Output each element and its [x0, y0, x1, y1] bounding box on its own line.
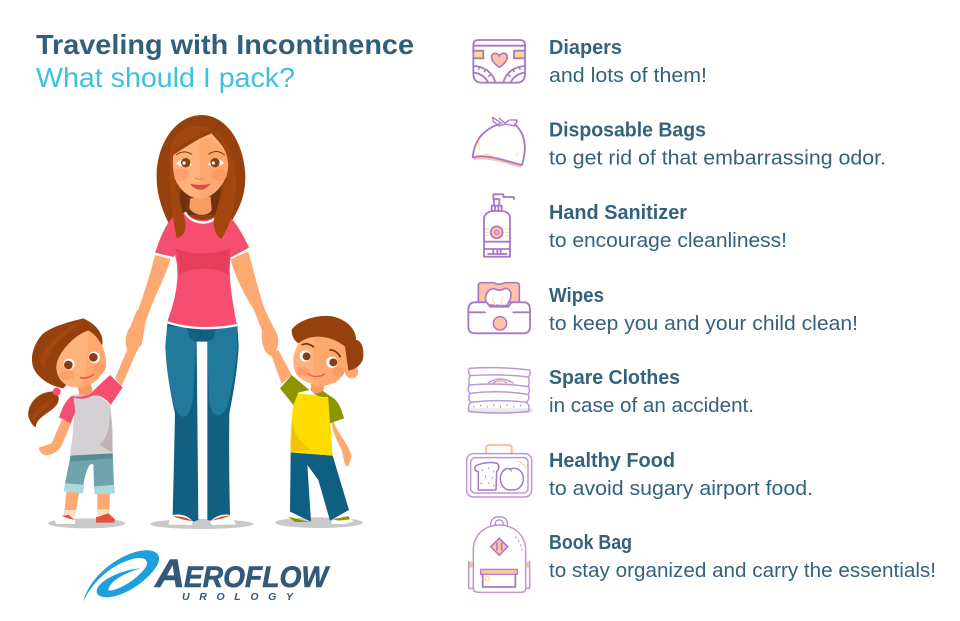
logo: Aeroflow Urology	[83, 550, 331, 603]
description: to encourage cleanliness!	[549, 230, 787, 252]
icon: bag	[473, 117, 525, 167]
description: to stay organized and carry the essentials!	[549, 560, 936, 582]
item: healthy food	[467, 445, 813, 500]
icon: wipes box	[468, 283, 530, 333]
logo wordmark: A	[154, 552, 185, 596]
heading: Hand Sanitizer	[549, 202, 687, 224]
icon: backpack	[469, 517, 530, 592]
title: Traveling with Incontinence	[36, 29, 414, 60]
woman	[132, 115, 273, 529]
item: disposable bags	[473, 117, 886, 170]
heading: Book Bag	[549, 532, 632, 554]
item: book bag	[469, 517, 936, 592]
heading: Wipes	[549, 285, 604, 307]
heading: Disposable Bags	[549, 120, 706, 142]
title	[36, 29, 414, 93]
boy	[254, 310, 363, 528]
heading: Diapers	[549, 37, 622, 59]
logo wordmark remainder: EROFLOW	[184, 561, 331, 594]
icon: diaper	[473, 40, 525, 83]
item: wipes	[468, 283, 858, 335]
icon: pump bottle	[484, 194, 514, 257]
description: to avoid sugary airport food.	[549, 478, 813, 500]
heading: Healthy Food	[549, 450, 675, 472]
logo subtitle: UROLOGY	[182, 591, 294, 603]
girl	[28, 310, 148, 528]
title: What should I pack?	[36, 62, 295, 93]
illustration: mother and two children	[28, 115, 363, 529]
logo swoosh	[83, 550, 159, 602]
item: hand sanitizer	[484, 194, 787, 257]
description: in case of an accident.	[549, 395, 754, 417]
description: and lots of them!	[549, 65, 707, 87]
description: to keep you and your child clean!	[549, 313, 858, 335]
icon: folded clothes	[467, 368, 533, 414]
icon: lunch box	[467, 445, 532, 497]
item: spare clothes	[467, 367, 754, 417]
heading: Spare Clothes	[549, 367, 680, 389]
description: to get rid of that embarrassing odor.	[549, 148, 886, 170]
item: diapers	[473, 37, 707, 87]
